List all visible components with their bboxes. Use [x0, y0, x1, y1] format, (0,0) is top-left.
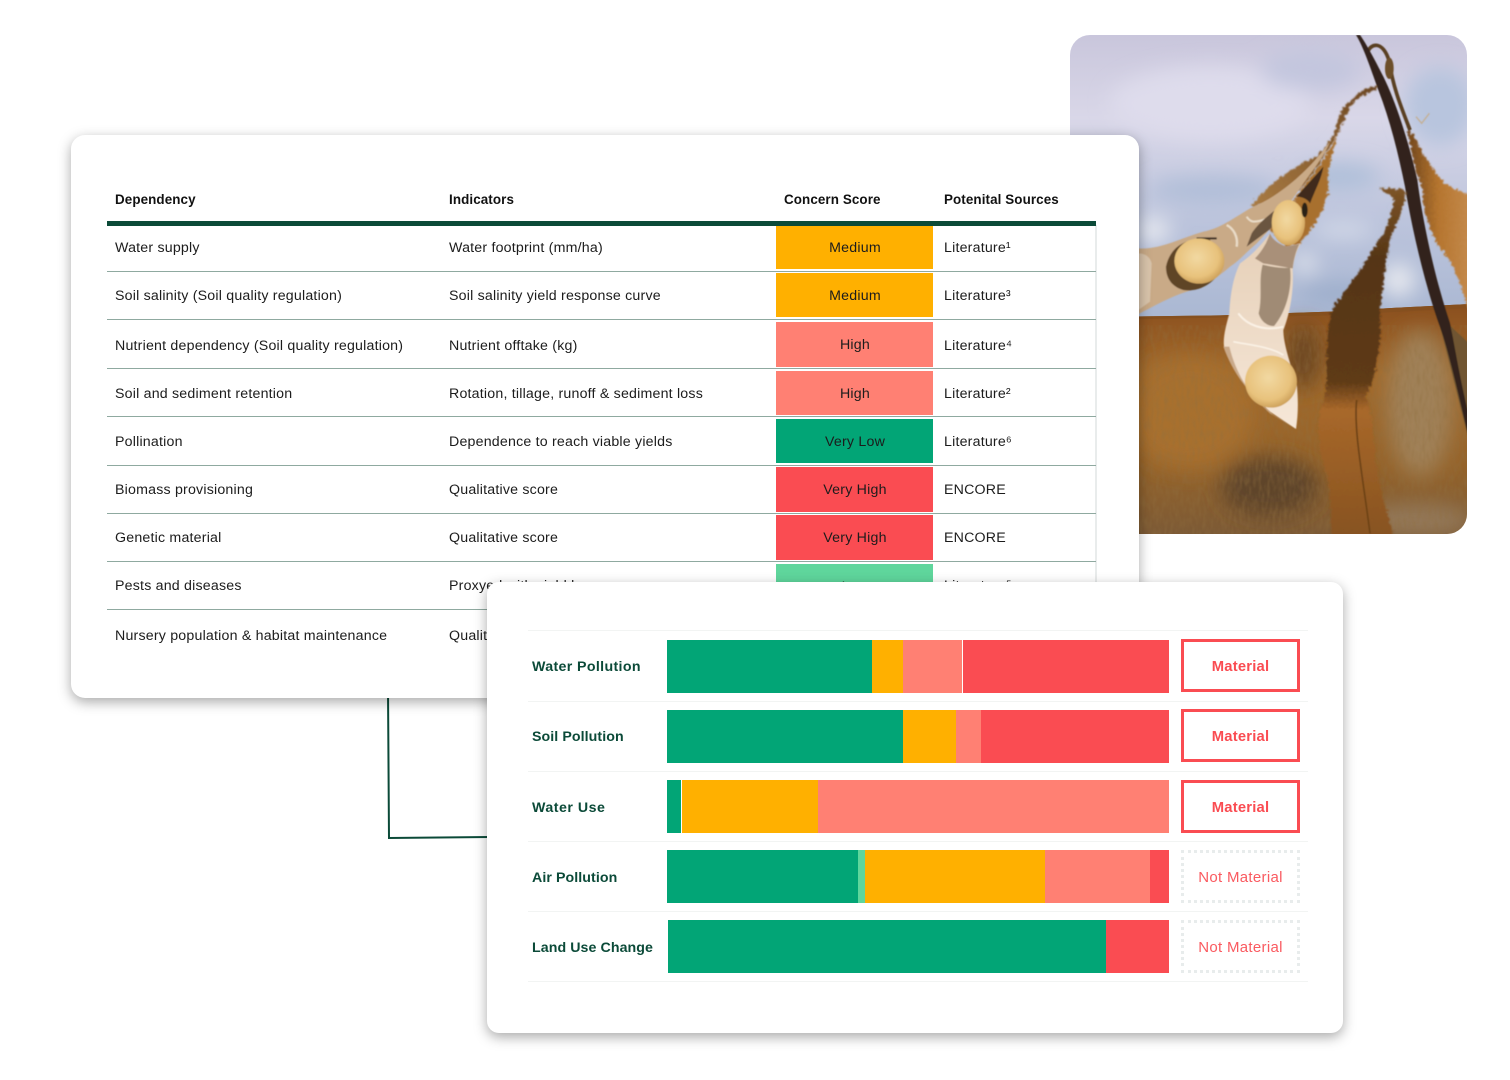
score: Medium [776, 273, 933, 317]
photo: soybean pods in a field [1070, 35, 1467, 534]
score: Very Low [776, 419, 933, 463]
tag: Not Material [1181, 850, 1300, 903]
bar: Water Pollution [667, 640, 1169, 693]
bar: Water Use [667, 780, 1169, 833]
tag: Not Material [1181, 920, 1300, 973]
source: Literature¹ [944, 240, 1011, 256]
row: Nutrient dependency: Nutrient dependency (Soil quality regulation) [115, 338, 403, 354]
header rule [107, 221, 1096, 226]
tag: Material [1181, 639, 1300, 692]
main stem [1356, 35, 1470, 443]
indicator: rotation: Rotation, tillage, runoff & sediment loss [449, 386, 703, 402]
row: Biomass provisioning: Biomass provisioning [115, 482, 253, 498]
label: Air Pollution: Air Pollution [532, 870, 617, 886]
centre pod shell [1224, 233, 1301, 429]
source: Literature⁴ [944, 338, 1012, 354]
row: Soil and sediment retention: Soil and sediment retention [115, 386, 292, 402]
lower right pod [1319, 188, 1407, 540]
label: Soil Pollution: Soil Pollution [532, 729, 624, 745]
lower stem end pod [1440, 320, 1470, 443]
panel: impact materiality bars [487, 582, 1343, 1033]
source: Literature² [944, 386, 1011, 402]
row: Pests and diseases: Pests and diseases [115, 578, 242, 594]
heading: Indicators: Indicators [449, 192, 514, 207]
panel: dependency table [71, 135, 1139, 698]
score: High: High [840, 337, 870, 353]
score: High [776, 322, 933, 367]
tag: Material: Material [1212, 728, 1269, 744]
score: Medium [776, 226, 933, 269]
bar: Air Pollution [667, 850, 1169, 903]
tag: Not Material: Not Material [1198, 939, 1283, 956]
indicator: water footprint: Water footprint (mm/ha) [449, 240, 603, 256]
row: Nursery population: Nursery population & habitat maintenance [115, 628, 387, 644]
score: Low [776, 564, 933, 608]
source: ENCORE [944, 530, 1006, 546]
hook stalk [1367, 45, 1410, 130]
label: Water Use: Water Use [532, 800, 605, 816]
indicator: yield response: Soil salinity yield response curve [449, 288, 661, 304]
label: Land Use Change: Land Use Change [532, 940, 653, 956]
tag: Not Material: Not Material [1198, 869, 1283, 886]
score: Medium: Medium [829, 240, 881, 256]
source: Literature³ [944, 288, 1011, 304]
beans [1174, 238, 1224, 284]
upper right pod [1407, 125, 1470, 317]
bar: Soil Pollution [667, 710, 1169, 763]
row: Pollination: Pollination [115, 434, 183, 450]
score: Low: Low [842, 578, 868, 594]
tag: Material: Material [1212, 800, 1269, 816]
row: Soil salinity: Soil salinity (Soil quality regulation) [115, 288, 342, 304]
score: Very Low: Very Low [825, 434, 885, 450]
source: Literature⁶ [944, 434, 1012, 450]
score: High: High [840, 386, 870, 402]
heading: Potential Sources: Potenital Sources [944, 192, 1059, 207]
centre pod right rim [1270, 132, 1338, 247]
heading: Dependency: Dependency [115, 192, 196, 207]
table right edge [1095, 225, 1097, 595]
row: Genetic material: Genetic material [115, 530, 222, 546]
source: ENCORE [944, 482, 1006, 498]
score: Very High [776, 467, 933, 512]
source: Literature⁵ [944, 578, 1012, 594]
score: Very High: Very High [823, 482, 887, 498]
score: High [776, 371, 933, 415]
label: Water Pollution: Water Pollution [532, 659, 641, 675]
score: Very High: Very High [823, 530, 887, 546]
tag: Material [1181, 709, 1300, 762]
score: Medium: Medium [829, 288, 881, 304]
indicator: qualitative: Qualitative score [449, 482, 558, 498]
indicator: yield loss: Proxyed with yield loss [449, 578, 597, 594]
branch and left pod outer [1250, 86, 1377, 207]
indicator: viable yields: Dependence to reach viable yields [449, 434, 672, 450]
connector line [387, 698, 487, 839]
indicator: qualitative: Qualitative score [449, 628, 558, 644]
tag: Material: Material [1212, 658, 1269, 674]
heading: Concern Score: Concern Score [784, 192, 881, 207]
row: Water supply: Water supply [115, 240, 200, 256]
indicator: qualitative: Qualitative score [449, 530, 558, 546]
left open pod shell [1138, 142, 1330, 314]
indicator: nutrient offtake: Nutrient offtake (kg) [449, 338, 578, 354]
tag: Material [1181, 780, 1300, 833]
score: Very High [776, 515, 933, 560]
bar: Land Use Change [668, 920, 1169, 973]
